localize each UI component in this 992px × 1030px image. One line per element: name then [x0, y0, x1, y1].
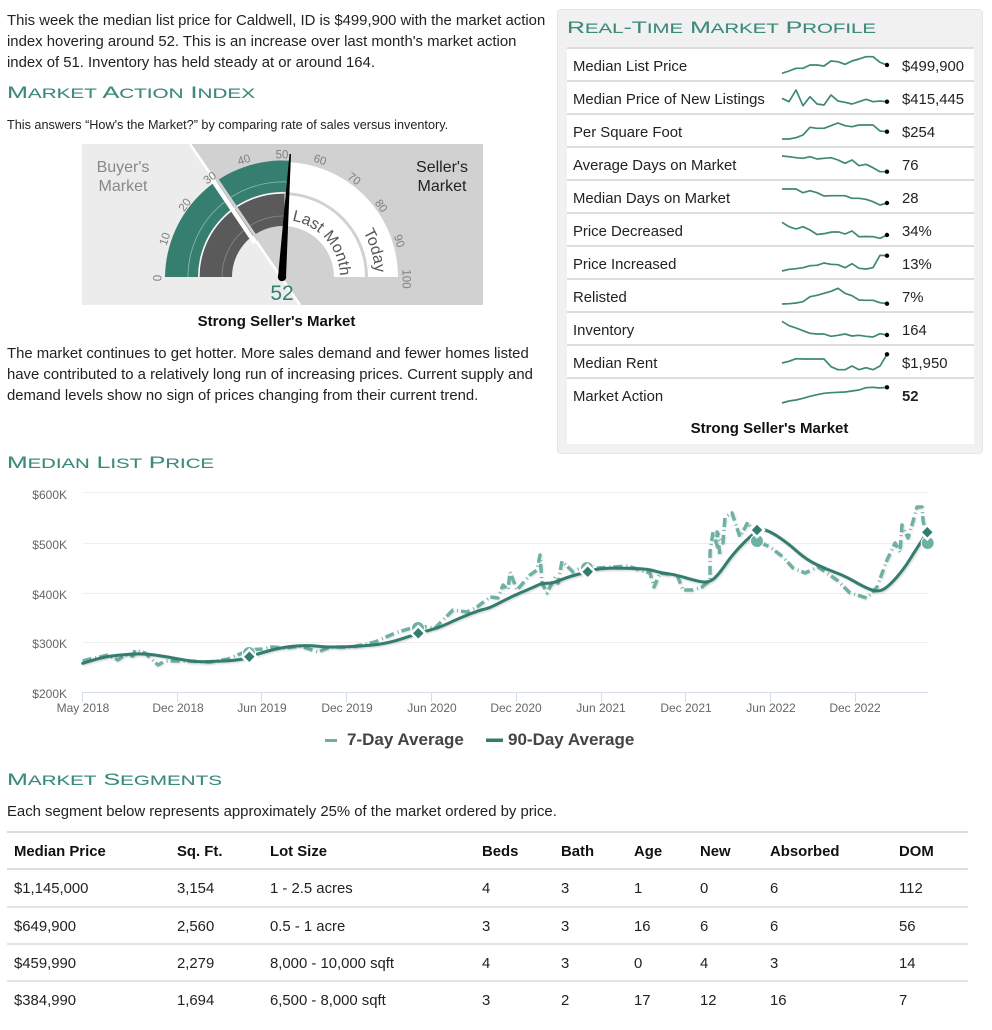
- row: median list price: $499,900: [902, 59, 964, 75]
- panel caption: Strong Seller's Market: [691, 420, 848, 437]
- row: median list price: [567, 47, 974, 80]
- chart grid: [83, 492, 928, 642]
- row: per square foot: Per Square Foot: [573, 125, 682, 141]
- 90-day markers: [242, 523, 934, 664]
- buyer's market label: [97, 159, 149, 195]
- y axis labels: $600K: [32, 488, 67, 502]
- gauge scale numbers: [152, 150, 412, 289]
- y axis labels: $200K: [32, 687, 67, 701]
- 7-day markers: [242, 534, 934, 660]
- table row 3: 4: [700, 956, 708, 972]
- x axis labels: Jun 2019: [237, 701, 287, 715]
- table header: Beds: [482, 844, 518, 860]
- needle: [278, 154, 291, 281]
- x axis labels: [57, 701, 881, 715]
- row: average days on market: Average Days on Market: [573, 158, 736, 174]
- gauge scale numbers: 0: [152, 275, 164, 281]
- table row 2: 3: [561, 919, 569, 935]
- table header: Bath: [561, 844, 594, 860]
- panel: real-time market profile: [557, 9, 983, 454]
- table row 3: [14, 956, 916, 972]
- row: median days on market: 28: [902, 191, 919, 207]
- table header: DOM: [899, 844, 934, 860]
- y axis labels: $300K: [32, 637, 67, 651]
- table row 2: 0.5 - 1 acre: [270, 919, 345, 935]
- table row 1: 3,154: [177, 881, 214, 897]
- x axis labels: Dec 2020: [490, 701, 542, 715]
- gauge scale numbers: 60: [312, 153, 328, 168]
- row: median rent: [567, 344, 974, 377]
- table row 1: 1 - 2.5 acres: [270, 881, 353, 897]
- row: median price of new listings: Median Price of New Listings: [573, 92, 765, 108]
- table row 1: $1,145,000: [14, 881, 88, 897]
- table row 3: 14: [899, 956, 916, 972]
- gauge scale numbers: 100: [400, 269, 412, 289]
- row: price increased: [567, 245, 974, 278]
- row: median list price: Median List Price: [573, 59, 687, 75]
- chart legend: [325, 730, 634, 749]
- chart legend: 90-Day Average: [508, 730, 634, 749]
- gauge scale numbers: 80: [372, 198, 389, 215]
- table row 1: 4: [482, 881, 490, 897]
- gauge scale numbers: 10: [158, 231, 173, 247]
- gauge: market action index: [82, 144, 483, 305]
- curved arc labels: Today: [365, 227, 384, 272]
- buyer's market label: Buyer's: [97, 159, 149, 176]
- buyer's market label: Market: [99, 178, 148, 195]
- intro paragraph: This week the median list price for Caldwell, ID is $499,900 with the market action: [7, 13, 545, 29]
- row: price decreased: 34%: [902, 224, 932, 240]
- row: inventory: [567, 311, 974, 344]
- table row 4: 12: [700, 993, 717, 1009]
- segments description: Each segment below represents approximately 25% of the market ordered by price.: [7, 804, 557, 820]
- x axis labels: Jun 2020: [407, 701, 457, 715]
- table header: New: [700, 844, 731, 860]
- table row 2: 3: [482, 919, 490, 935]
- market commentary: demand levels show no sign of prices changing from their current trend.: [7, 388, 478, 404]
- line chart: median list price: [32, 488, 934, 749]
- row: inventory: 164: [902, 323, 927, 339]
- x axis labels: Dec 2018: [152, 701, 204, 715]
- row: price decreased: Price Decreased: [573, 224, 683, 240]
- y axis labels: [32, 488, 67, 701]
- x axis labels: Jun 2022: [746, 701, 796, 715]
- row: relisted: 7%: [902, 290, 924, 306]
- table row 2: 6: [770, 919, 778, 935]
- table row 3: 0: [634, 956, 642, 972]
- table row 3: 2,279: [177, 956, 214, 972]
- row: price increased: 13%: [902, 257, 932, 273]
- table row 1: [14, 881, 923, 897]
- table row 4: 2: [561, 993, 569, 1009]
- x axis labels: Dec 2022: [829, 701, 881, 715]
- gauge scale numbers: 90: [391, 233, 406, 249]
- row: per square foot: [567, 113, 974, 146]
- table header: Lot Size: [270, 844, 327, 860]
- chart legend: 7-Day Average: [347, 730, 464, 749]
- x axis labels: Dec 2021: [660, 701, 712, 715]
- market action description: This answers “How's the Market?” by comparing rate of sales versus inventory.: [7, 118, 448, 132]
- table header: Sq. Ft.: [177, 844, 222, 860]
- gauge scale numbers: 70: [345, 171, 362, 188]
- heading: market segments: M ARKET S EGMENTS: [7, 770, 222, 789]
- curved arc labels: [293, 210, 384, 275]
- gauge value: 52: [270, 282, 294, 305]
- row: median days on market: [567, 179, 974, 212]
- table header: [14, 844, 934, 860]
- table row 4: 7: [899, 993, 907, 1009]
- today arc: teal: [165, 160, 290, 277]
- table row 4: 3: [482, 993, 490, 1009]
- last month arc: white remainder: [285, 195, 365, 277]
- row: price increased: Price Increased: [573, 257, 676, 273]
- table row 4: 16: [770, 993, 787, 1009]
- y axis labels: $500K: [32, 538, 67, 552]
- row: median days on market: Median Days on Market: [573, 191, 730, 207]
- row: relisted: [567, 278, 974, 311]
- x axis labels: Jun 2021: [576, 701, 626, 715]
- table row 3: 3: [770, 956, 778, 972]
- table: market segments: [7, 831, 968, 1009]
- gauge scale numbers: 50: [276, 150, 288, 162]
- table row 4: $384,990: [14, 993, 76, 1009]
- seller's market label: Market: [418, 178, 467, 195]
- table row 1: 0: [700, 881, 708, 897]
- table row 1: 112: [899, 881, 923, 897]
- row: price decreased: [567, 212, 974, 245]
- intro paragraph: index hovering around 52. This is an increase over last month's market action: [7, 34, 516, 50]
- row: inventory: Inventory: [573, 323, 634, 339]
- table header: Median Price: [14, 844, 106, 860]
- table row 2: $649,900: [14, 919, 76, 935]
- row: relisted: Relisted: [573, 290, 627, 306]
- table header: Absorbed: [770, 844, 839, 860]
- table row 1: 3: [561, 881, 569, 897]
- x axis labels: Dec 2019: [321, 701, 373, 715]
- table header: Age: [634, 844, 662, 860]
- gauge scale numbers: 30: [202, 170, 219, 187]
- table row 4: 6,500 - 8,000 sqft: [270, 993, 386, 1009]
- gauge caption: Strong Seller's Market: [198, 313, 355, 330]
- table row 3: 4: [482, 956, 490, 972]
- table row 2: 16: [634, 919, 651, 935]
- table row 2: 2,560: [177, 919, 214, 935]
- row: market action: [567, 377, 974, 410]
- table row 4: 1,694: [177, 993, 214, 1009]
- gauge scale numbers: 20: [177, 197, 194, 214]
- row: average days on market: 76: [902, 158, 919, 174]
- intro paragraph: [7, 13, 545, 71]
- 90-day average series: [83, 530, 927, 663]
- row: median price of new listings: [567, 80, 974, 113]
- market commentary: The market continues to get hotter. More sales demand and fewer homes listed: [7, 346, 529, 362]
- row: per square foot: $254: [902, 125, 935, 141]
- intro paragraph: index of 51. Inventory has held steady at or around 164.: [7, 55, 375, 71]
- seller's market label: [416, 159, 468, 195]
- 7-day average series: [83, 507, 928, 665]
- seller's market label: Seller's: [416, 159, 468, 176]
- gauge scale numbers: 40: [236, 153, 252, 168]
- row: market action: Market Action: [573, 389, 663, 405]
- table row 4: 17: [634, 993, 651, 1009]
- table row 2: [14, 919, 916, 935]
- table row 1: 6: [770, 881, 778, 897]
- market divider strip: [212, 179, 255, 243]
- table row 3: $459,990: [14, 956, 76, 972]
- x axis labels: May 2018: [57, 701, 110, 715]
- heading: median list price: M EDIAN L IST P RICE: [7, 453, 214, 472]
- table row 2: 6: [700, 919, 708, 935]
- today arc: white remainder: [288, 162, 398, 277]
- row: average days on market: [567, 146, 974, 179]
- x axis: [82, 692, 928, 702]
- row: median rent: Median Rent: [573, 356, 657, 372]
- table row 4: [14, 993, 907, 1009]
- curved arc labels: Last Month: [293, 210, 351, 275]
- table row 1: 1: [634, 881, 642, 897]
- market commentary: have contributed to a relatively long run of increasing prices. Current supply and: [7, 367, 533, 383]
- y axis labels: $400K: [32, 588, 67, 602]
- row: median price of new listings: $415,445: [902, 92, 964, 108]
- table row 3: 3: [561, 956, 569, 972]
- market commentary: [7, 346, 533, 404]
- heading: market action index: M ARKET A CTION I NDEX: [7, 83, 256, 102]
- table row 2: 56: [899, 919, 916, 935]
- table row 3: 8,000 - 10,000 sqft: [270, 956, 394, 972]
- last month arc: dark gray: [199, 193, 284, 277]
- row: median rent: $1,950: [902, 356, 948, 372]
- row: market action: 52: [902, 389, 919, 405]
